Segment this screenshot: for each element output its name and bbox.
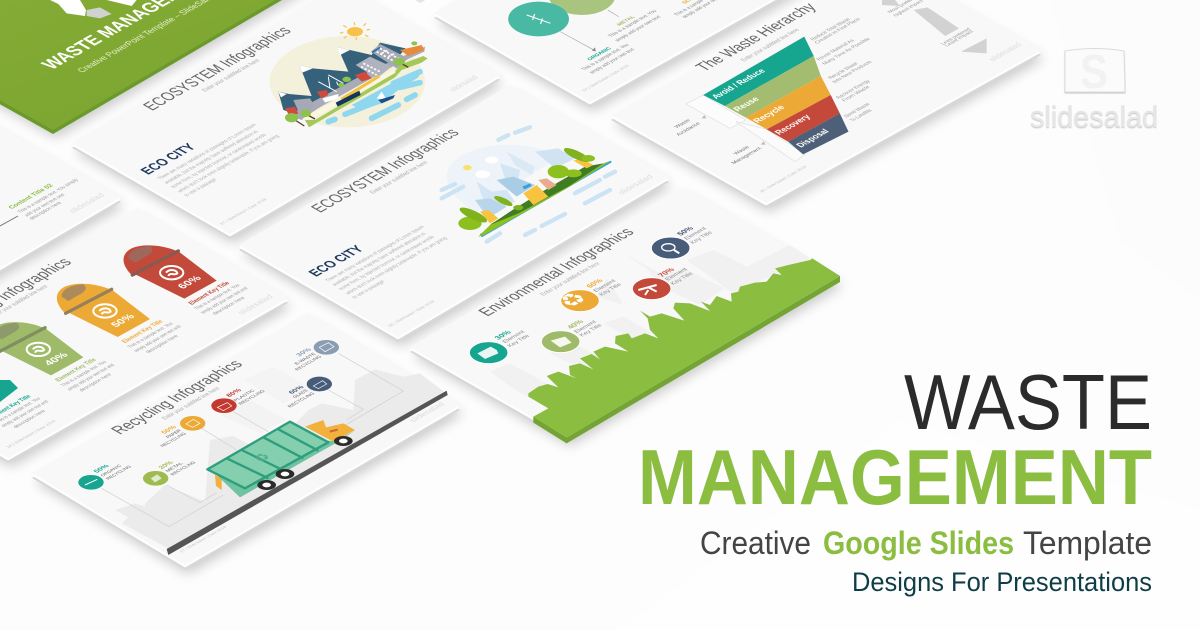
recycling labels (92, 347, 323, 481)
recycling labels: RECYCLING (294, 355, 323, 371)
footer: 57 | SlideSalad | Date 2018 (218, 197, 269, 226)
funnel right labels: Created In First Place (813, 17, 862, 45)
organic label: simply add your own text (588, 47, 637, 75)
key labels: Key Title (670, 272, 695, 286)
recycling labels: E-WASTE (293, 352, 317, 366)
key labels: Element (573, 320, 599, 334)
recycling labels: 50% (160, 425, 179, 435)
bin: green 40%: Element Key Title (54, 357, 99, 383)
metal label: simply add your own text (614, 15, 663, 43)
key labels: 50% (674, 225, 696, 237)
subheading: Enter your subtitled line here (739, 27, 801, 63)
heading: Environmental Infographics (474, 225, 638, 319)
icon: recycle circle: ♻ (551, 288, 594, 312)
icon: truck circle (469, 342, 508, 364)
tagline: Creative (700, 525, 811, 561)
funnel right labels (809, 17, 874, 123)
metal label: This is a sample text. You (607, 9, 659, 38)
recycling labels: PLASTIC (232, 388, 257, 402)
panel: eco city slide one (72, 0, 503, 243)
watermark: slidesalad (986, 41, 1024, 63)
icon: person circle (632, 278, 671, 300)
watermark: slidesalad (615, 173, 655, 196)
funnel left labels: Waste (732, 145, 752, 156)
recycling labels: 50% (92, 463, 112, 474)
funnel chart: Reuse (731, 95, 761, 113)
key labels: Key Title (598, 283, 623, 297)
recycling labels: METAL (164, 461, 185, 473)
funnel right labels: To Landfills (849, 108, 874, 123)
paragraph: There are many variations of passages of Lorem Ipsum (156, 123, 259, 181)
subheading: Enter your subtitled line here (369, 160, 430, 195)
paragraph: to use a passage (183, 178, 219, 198)
panel: environmental infographics slide (410, 187, 843, 446)
panel: content title slide (0, 104, 124, 364)
organic label: ORGANIC (586, 46, 613, 62)
bin: orange 50%: simply add your own text and (133, 325, 183, 353)
logo: slidesalad: slidesalad (1030, 99, 1158, 134)
bin: green 40%: 40% (42, 351, 71, 368)
funnel chart (686, 37, 848, 162)
recycling labels: RECYCLING (159, 431, 188, 448)
bin: red 60%: 60% (176, 274, 205, 291)
bin: red 60% (124, 245, 250, 316)
panel: small slide corner (400, 0, 440, 3)
funnel right labels: Send Waste (843, 102, 872, 119)
key labels: 70% (655, 266, 677, 278)
preference labels (886, 0, 976, 48)
heading: ECOSYSTEM Infographics (307, 126, 464, 215)
footer: 16 | SlideSalad | Date 2018 (5, 419, 58, 449)
heading: ECOSYSTEM Infographics (139, 24, 296, 113)
funnel chart: Recovery (772, 113, 813, 136)
recycling labels: ORGANIC (99, 463, 123, 477)
skyline chart (490, 245, 840, 443)
icon: bulb circle (651, 237, 690, 259)
paragraph: some form, by injected humour, or randomised words (170, 133, 269, 189)
content description: add your own text and (23, 193, 67, 218)
tagline: Google Slides (823, 525, 1014, 561)
panel: eco city slide two (239, 85, 672, 346)
funnel right labels: From Waste (841, 85, 872, 103)
funnel left labels: Management (730, 146, 764, 165)
icon: glass circle (307, 377, 332, 391)
recycling labels: 80% (225, 388, 244, 398)
illustration: garbage truck (207, 420, 355, 497)
bin: teal 30%: simply add your own text and (0, 400, 50, 428)
bin: red 60%: description here (211, 296, 247, 316)
logo: slidesalad: S (1080, 46, 1108, 99)
logo: slidesalad (1030, 46, 1158, 134)
icon: metal circle (143, 471, 168, 486)
icon: paper circle (180, 416, 205, 431)
bin: red 60%: simply add your own text and (199, 286, 250, 315)
recycling labels: 60% (287, 385, 306, 395)
key labels: Key Title (506, 334, 532, 348)
footer: 34 | SlideSalad | Date 2018 (580, 64, 631, 92)
bin: red 60%: This is a sample text. You (193, 283, 242, 311)
preference labels: highest impact (892, 0, 926, 18)
eco city title: ECO CITY (136, 141, 200, 177)
bin: orange 50% (57, 284, 183, 354)
bin: green 40% (0, 322, 116, 393)
panel: waste hierarchy slide (611, 0, 1044, 212)
key labels: 40% (564, 318, 586, 330)
funnel right labels: Many Time As Possible (821, 37, 872, 66)
watermark: slidesalad (235, 293, 275, 316)
funnel right labels: Recycle Waste (827, 62, 860, 80)
subheading: Enter your subtitled line here (161, 386, 222, 421)
funnel right labels: Into New Products (831, 60, 874, 84)
recycling labels: 20% (157, 460, 176, 470)
recycling labels: PAPER (165, 428, 183, 439)
funnel right labels: Reuse Material As (815, 38, 856, 62)
paragraph: which don't look even slightly believable. If you are going (176, 134, 281, 194)
paragraph: some form, by injected humour, or randomised words (338, 235, 437, 291)
recycling labels: GLASS (291, 389, 309, 399)
bin: teal 30% (0, 380, 50, 429)
funnel chart: Recycle (751, 104, 787, 124)
icon: bin circle (541, 331, 580, 353)
recycling labels: RECYCLING (105, 465, 133, 481)
footer: 35 | SlideSalad | Date 2018 (758, 165, 808, 193)
key labels: Element (664, 267, 690, 282)
recycling labels: RECYCLING (237, 389, 266, 406)
secondary tagline: Designs For Presentations (852, 567, 1152, 597)
watermark: slidesalad (406, 401, 447, 424)
icon: plastic circle (211, 398, 237, 413)
arrow: preference scale (882, 0, 987, 53)
illustration: green city (442, 127, 615, 242)
content title: Content Title 02 (7, 183, 55, 210)
subheading: Enter your subtitled line here (201, 58, 262, 93)
key labels: 60% (584, 277, 605, 289)
watermark: slidesalad (67, 192, 107, 214)
paragraph: available, but the majority have suffered alteration in (331, 232, 428, 287)
panel: recycling bins slide (0, 208, 291, 467)
bin: teal 30%: description here (12, 409, 48, 429)
funnel right labels: Reduce Total Waste (809, 17, 852, 42)
headline: management: MANAGEMENT (638, 433, 1152, 521)
icon: organic circle (78, 475, 104, 490)
bin: green 40%: description here (78, 373, 114, 393)
watermark: slidesalad (447, 74, 480, 93)
key labels: 30% (492, 329, 514, 341)
tagline: Template (1023, 525, 1152, 561)
footer: 27 | SlideSalad | Date 2018 (178, 525, 228, 553)
funnel left labels (673, 118, 764, 165)
paragraph: which don't look even slightly believable. If you are going (344, 236, 449, 296)
organic label: This is a sample text. You (580, 43, 631, 72)
headline: waste: WASTE (904, 358, 1152, 446)
heading: Recycling Infographics (107, 357, 247, 437)
content description: description here (28, 201, 64, 221)
illustration: eco city (270, 22, 428, 127)
preference labels: Least preferred (940, 27, 973, 46)
paragraph: available, but the majority have suffered alteration in (163, 130, 260, 185)
icon: recycle symbol on truck: ♻ (250, 451, 275, 465)
bin: orange 50%: 50% (109, 313, 138, 329)
key labels: Key Title (579, 323, 604, 338)
key labels: Element (501, 330, 527, 344)
funnel left labels: Avoidance (675, 122, 702, 137)
funnel chart: Disposal (794, 128, 831, 149)
funnel chart: Avoid / Reduce (709, 67, 767, 100)
content description: This is a sample text. You simply (16, 178, 80, 214)
icon: recycling arrows (50, 0, 137, 18)
paragraph: to use a passage (351, 280, 387, 300)
recycling labels: 30% (295, 347, 314, 358)
recycling labels: RECYCLING (169, 460, 197, 476)
recycling labels: RECYCLING (286, 391, 316, 408)
preference labels: Least impact (943, 29, 976, 48)
bin: red 60%: Element Key Title (187, 281, 232, 306)
paragraph: There are many variations of passages of Lorem Ipsum (324, 225, 427, 283)
panel: recycling truck slide (32, 313, 463, 574)
funnel right labels: Recover Energy (835, 79, 872, 100)
key labels: Element (683, 226, 709, 241)
icon: e-waste circle (314, 340, 339, 355)
panel: waste types slide (434, 0, 863, 111)
tagline (700, 525, 1152, 561)
footer: 58 | SlideSalad | Date 2018 (386, 299, 437, 328)
metal label: METAL (616, 15, 638, 27)
bin: orange 50%: Element Key Title (121, 319, 165, 344)
circles: organic and metal (508, 0, 619, 51)
key labels: Key Title (689, 231, 714, 245)
panel: green title slide (0, 0, 326, 138)
bin: green 40%: This is a sample text. You (60, 360, 108, 388)
eco city title: ECO CITY (304, 243, 368, 279)
subheading: Enter your subtitled line here (539, 261, 602, 297)
key labels: Element (592, 279, 618, 293)
skyline and connector lines (102, 353, 448, 555)
bin: orange 50%: This is a sample text. You (126, 322, 175, 349)
bin: green 40%: simply add your own text and (66, 363, 116, 392)
key labels (492, 225, 714, 348)
bin: orange 50%: description here (145, 334, 180, 354)
funnel left labels: Waste (673, 118, 692, 129)
